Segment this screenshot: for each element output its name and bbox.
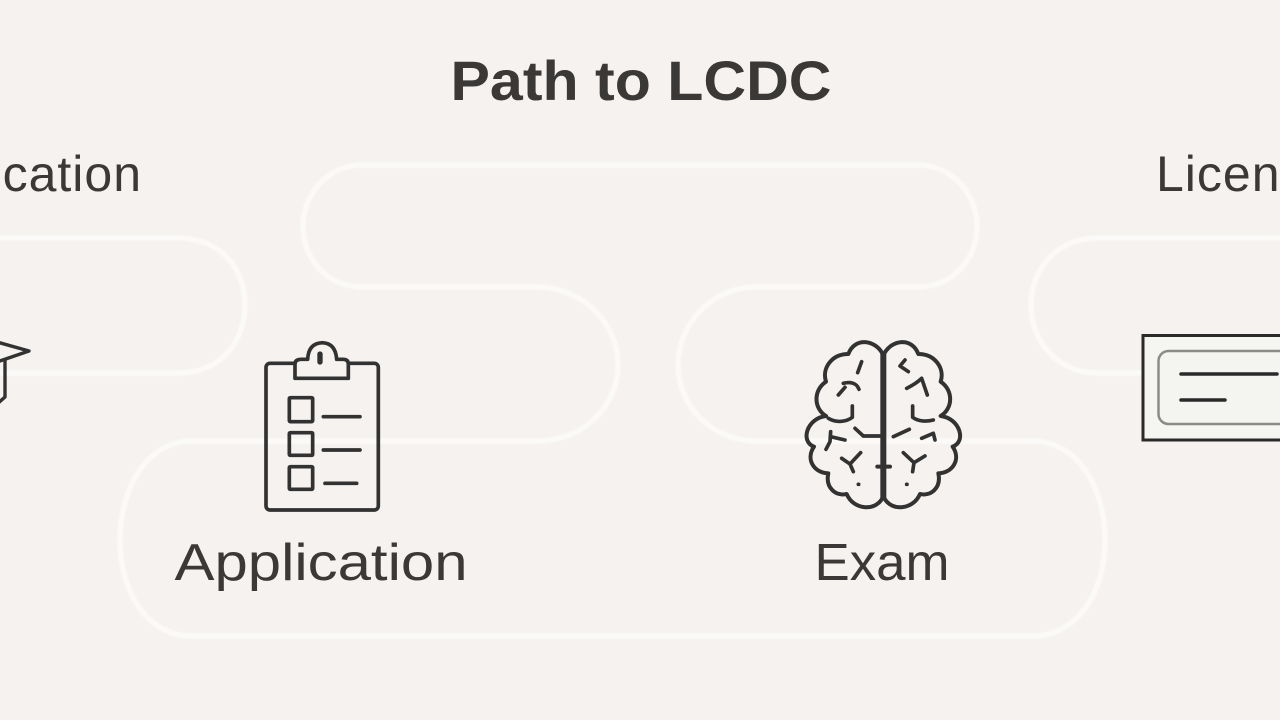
icon: brain [807,342,960,507]
step label: Application: Application [174,534,468,592]
icon: license card [1143,336,1280,440]
title: Path to LCDC [450,49,832,112]
icon: clipboard checklist [266,343,378,510]
icon: graduation cap [0,342,29,404]
winding path track [0,165,1280,636]
step label: Exam: Exam [814,534,950,592]
